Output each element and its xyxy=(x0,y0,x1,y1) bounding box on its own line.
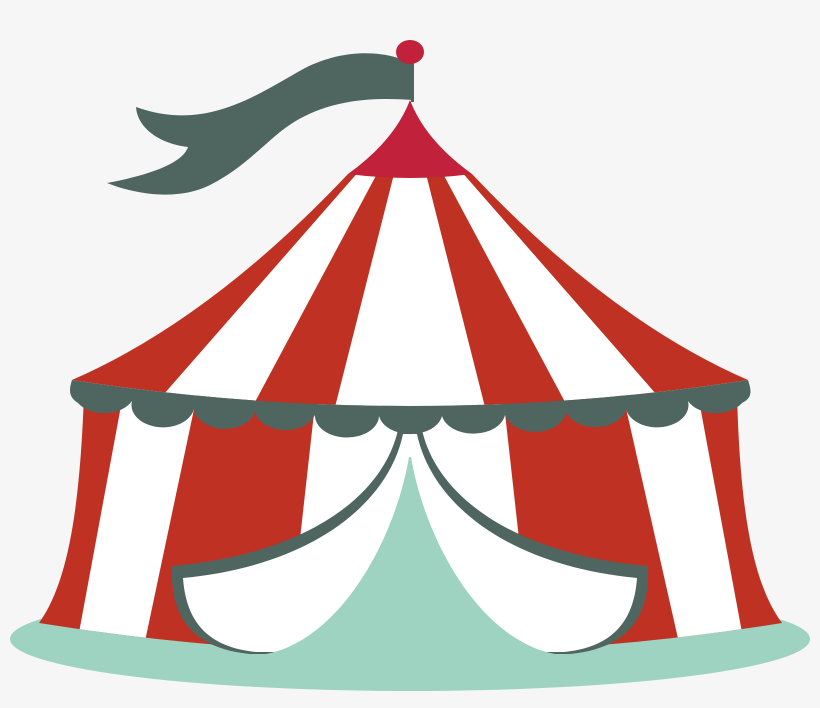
door: interior opening xyxy=(266,457,555,654)
door: left curtain xyxy=(172,430,410,654)
top cone xyxy=(348,100,472,178)
ground ellipse xyxy=(10,587,810,691)
door: right curtain xyxy=(410,430,648,654)
flag pole xyxy=(411,60,414,102)
flag xyxy=(107,53,413,195)
scalloped valance xyxy=(70,380,750,438)
striped roof xyxy=(72,170,748,415)
tent walls xyxy=(39,395,782,665)
red knob xyxy=(396,40,424,64)
